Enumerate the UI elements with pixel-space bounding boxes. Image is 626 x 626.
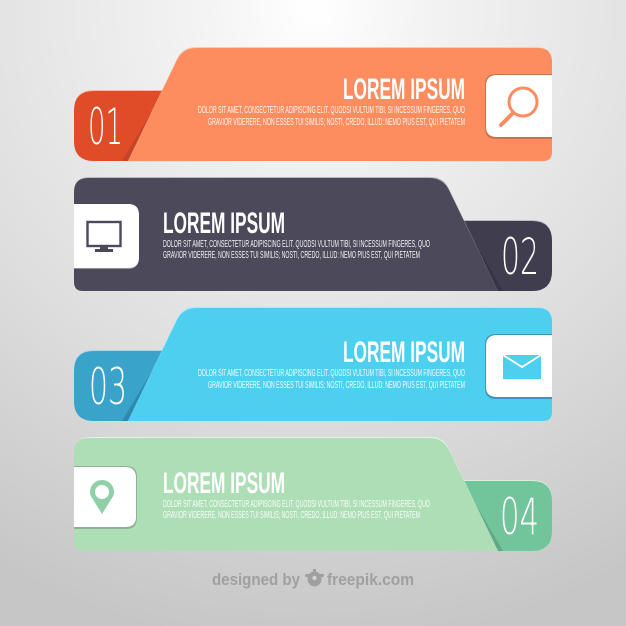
heading: LOREM IPSUM <box>343 73 465 106</box>
icon: map pin in white box <box>74 466 137 529</box>
icon: monitor in white box <box>74 204 139 269</box>
number tab 04 <box>456 480 552 551</box>
blue main shape <box>128 307 552 421</box>
number tab 02 <box>456 220 552 291</box>
number tab 04: 04 <box>500 488 539 546</box>
green main shape <box>74 437 498 551</box>
icon: envelope in white box <box>485 334 552 399</box>
footer: freepik credit: freepik.com <box>327 571 414 589</box>
number tab 01 <box>74 90 170 161</box>
icon: search in white box <box>485 74 552 139</box>
orange main shape <box>128 47 552 161</box>
body text <box>163 239 430 261</box>
footer: freepik credit <box>212 569 414 589</box>
icon: freepik mascot <box>305 569 324 586</box>
dark main shape <box>74 177 498 291</box>
number tab 03 <box>74 350 170 421</box>
panel: banner 02 dark <box>74 177 552 291</box>
heading: LOREM IPSUM <box>163 207 285 240</box>
body text <box>163 499 430 521</box>
body text <box>198 105 465 128</box>
body text <box>198 368 465 391</box>
heading: LOREM IPSUM <box>163 467 285 500</box>
number tab 02: 02 <box>501 228 539 286</box>
number tab 03: 03 <box>89 358 127 416</box>
panel: banner 04 green <box>74 437 552 551</box>
panel: banner 03 blue <box>74 307 552 421</box>
footer: freepik credit: designed by <box>212 571 301 589</box>
heading: LOREM IPSUM <box>343 336 465 369</box>
number tab 01: 01 <box>88 98 123 156</box>
panel: banner 01 orange <box>74 47 552 161</box>
